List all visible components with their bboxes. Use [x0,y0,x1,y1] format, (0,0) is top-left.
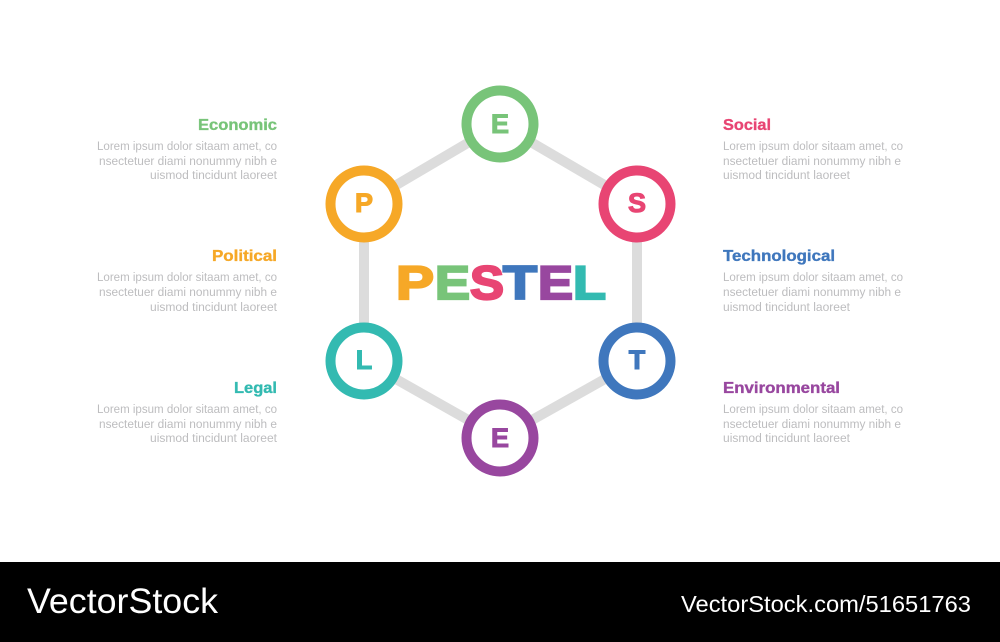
node: Political P: P [355,188,373,218]
text block: Legal [97,380,278,445]
node: Social S [604,170,670,238]
text block: Political: Political [212,248,277,265]
text block: Legal: Legal [234,380,277,397]
node: Economic E [466,90,534,158]
node: Environmental E [466,404,534,472]
text block: Political: Lorem ipsum dolor sitaam amet, co [97,270,277,284]
text block: Political: uismod tincidunt laoreet [150,300,278,314]
node: Technological T [604,328,670,394]
text block: Social: Lorem ipsum dolor sitaam amet, co [723,139,903,153]
footer image id: VectorStock.com/51651763 [681,591,971,617]
hexagon connector [364,124,637,438]
node: Social S: S [628,188,646,218]
text block: Social [723,117,903,182]
text block: Technological [723,248,903,314]
center title PESTEL: P [396,256,434,309]
text block: Technological: Technological [723,248,835,265]
text block: Environmental: uismod tincidunt laoreet [723,431,851,445]
text block: Environmental: Environmental [723,380,840,397]
node: Legal L [330,328,398,394]
text block: Social: uismod tincidunt laoreet [723,168,851,182]
node: Technological T: T [629,345,646,375]
footer brand: VectorStock [27,582,219,621]
center title PESTEL: L [573,256,606,309]
text block: Political: nsectetuer diami nonummy nibh e [99,285,277,299]
text block: Social: nsectetuer diami nonummy nibh e [723,154,901,168]
text block: Legal: nsectetuer diami nonummy nibh e [99,417,277,431]
node: Legal L: L [356,345,372,375]
text block: Technological: uismod tincidunt laoreet [723,300,851,314]
text block: Environmental: Lorem ipsum dolor sitaam amet, co [723,402,903,416]
text block: Economic: Lorem ipsum dolor sitaam amet, co [97,139,277,153]
node: Economic E: E [491,109,509,139]
footer bar [0,562,1000,642]
text block: Economic [97,117,278,182]
text block: Economic: Economic [198,117,277,134]
center title PESTEL: T [503,256,537,309]
text block: Legal: Lorem ipsum dolor sitaam amet, co [97,402,277,416]
node: Political P [330,170,398,238]
center title PESTEL [396,256,606,309]
text block: Social: Social [723,117,771,134]
node: Environmental E: E [491,423,509,453]
center title PESTEL: E [435,256,470,309]
text block: Political [97,248,278,314]
text block: Economic: uismod tincidunt laoreet [150,168,278,182]
text block: Technological: Lorem ipsum dolor sitaam amet, co [723,270,903,284]
text block: Technological: nsectetuer diami nonummy nibh e [723,285,901,299]
text block: Environmental: nsectetuer diami nonummy nibh e [723,417,901,431]
text block: Environmental [723,380,903,445]
center title PESTEL: E [538,256,573,309]
text block: Economic: nsectetuer diami nonummy nibh e [99,154,277,168]
center title PESTEL: S [470,256,504,309]
text block: Legal: uismod tincidunt laoreet [150,431,278,445]
